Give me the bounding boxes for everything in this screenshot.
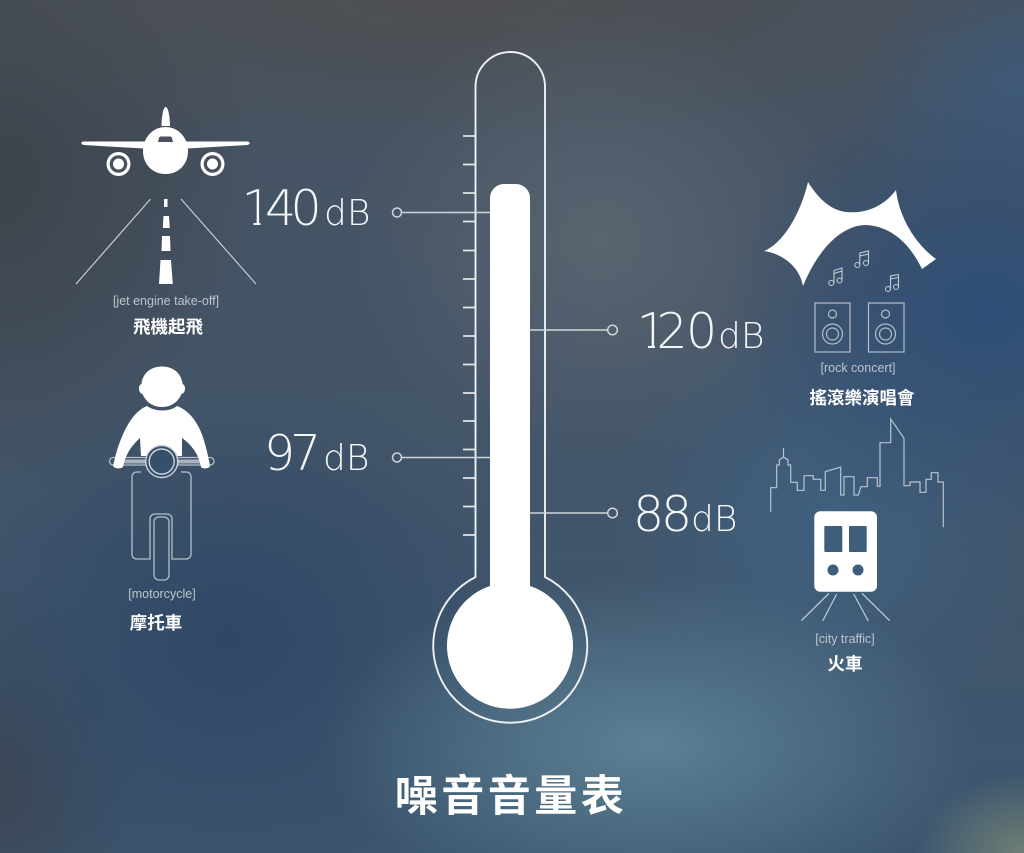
label: motorcycle: [motorcycle] — [128, 587, 196, 601]
marker: 120dB — [530, 312, 762, 348]
icon: rider — [113, 366, 210, 478]
icon: skyline — [771, 419, 943, 527]
marker: 88dB — [530, 486, 737, 543]
marker: 97dB: 97 — [264, 425, 321, 482]
marker: 88dB: dB — [691, 499, 737, 540]
scale ticks — [463, 136, 475, 535]
marker: 140dB — [246, 188, 490, 226]
icon: train — [814, 511, 877, 592]
title: 噪音音量表 — [395, 773, 627, 821]
thermometer outline — [433, 52, 587, 723]
label: city traffic: [city traffic] — [815, 632, 875, 646]
marker: 140dB: 40 — [265, 180, 322, 237]
icon: speakers — [815, 303, 904, 352]
thermometer fill — [447, 184, 573, 709]
panel: city traffic — [771, 419, 943, 674]
marker: 97dB: dB — [323, 438, 369, 479]
marker: 88dB: 88 — [633, 486, 692, 543]
icon: stage tent — [764, 182, 936, 286]
icon: runway — [76, 199, 256, 284]
label: 飛機起飛: 飛機起飛 — [133, 317, 203, 337]
icon: scooter — [110, 458, 214, 580]
marker: 120dB: 1 — [636, 303, 668, 360]
label: rock concert: [rock concert] — [820, 361, 896, 375]
panel: rock concert — [764, 182, 936, 408]
label: 搖滾樂演唱會: 搖滾樂演唱會 — [810, 388, 915, 408]
icon: music notes — [829, 251, 898, 292]
icon: airplane — [81, 107, 250, 176]
panel: motorcycle — [110, 366, 214, 633]
label: 火車: 火車 — [828, 654, 862, 674]
label: jet engine take-off: [jet engine take-off] — [113, 294, 219, 308]
marker: 120dB: 20 — [656, 303, 717, 360]
marker: 140dB: dB — [324, 193, 370, 234]
thermometer — [433, 52, 587, 723]
icon: track rays — [801, 593, 890, 621]
label: 摩托車: 摩托車 — [130, 613, 182, 633]
marker: 140dB: 1 — [242, 180, 273, 237]
marker: 120dB: dB — [718, 316, 764, 357]
marker: 97dB — [264, 425, 490, 482]
panel: jet engine take-off — [76, 107, 256, 337]
